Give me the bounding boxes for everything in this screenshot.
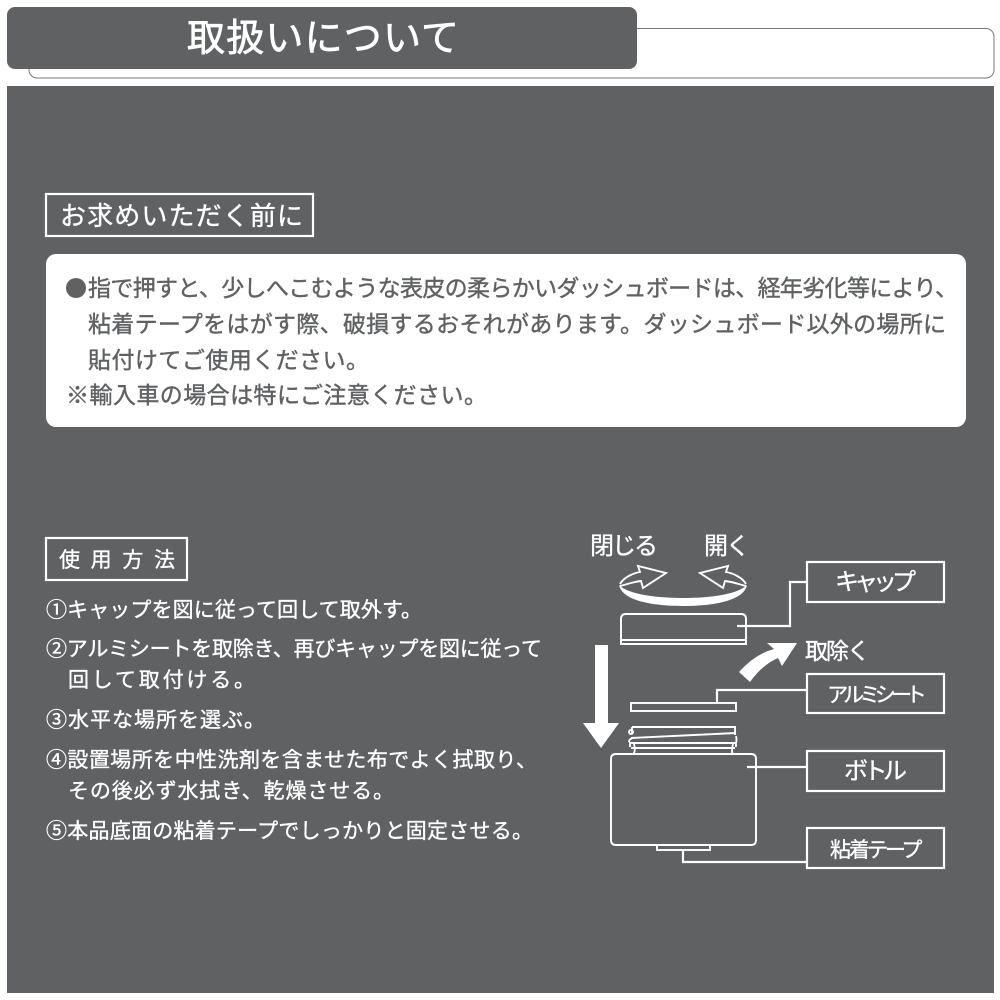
label box: bottle: ボトル — [844, 758, 907, 785]
notice text: 指で押すと、少しへこむような表皮の柔らかいダッシュボードは、経年劣化等により、 — [88, 275, 958, 301]
label box: cap: キャップ — [835, 569, 916, 596]
usage steps: ①キャップを図に従って回して取外す。 — [46, 599, 422, 622]
label: remove: 取除く — [805, 638, 870, 664]
usage steps: ⑤本品底面の粘着テープでしっかりと固定させる。 — [46, 820, 533, 843]
header outline bar — [29, 28, 994, 78]
usage steps: ②アルミシートを取除き、再びキャップを図に従って — [46, 638, 542, 661]
heading box: before purchase — [46, 194, 313, 236]
bottle — [611, 727, 756, 845]
icon: rotation ring with arrows — [619, 566, 747, 606]
usage steps: 回して取付ける。 — [68, 669, 255, 692]
leader: aluminium sheet — [717, 690, 807, 703]
leader: cap — [737, 582, 807, 626]
label box: aluminium sheet — [807, 674, 944, 713]
usage steps: ④設置場所を中性洗剤を含ませた布でよく拭取り、 — [46, 749, 537, 772]
adhesive tape — [657, 845, 710, 850]
arrow: remove — [739, 643, 797, 682]
notice text — [66, 275, 958, 408]
white notice panel — [46, 254, 966, 427]
notice text: 貼付けてご使用ください。 — [88, 347, 369, 373]
heading box: usage — [46, 538, 187, 580]
leader: tape — [683, 850, 807, 862]
label box: tape — [807, 828, 944, 868]
notice text: 粘着テープをはがす際、破損するおそれがあります。ダッシュボード以外の場所に — [88, 311, 946, 337]
aluminium sheet — [631, 703, 736, 711]
notice text: ※輸入車の場合は特にご注意ください。 — [66, 382, 487, 408]
heading box: usage: 使用方法 — [59, 549, 175, 572]
title: 取扱いについて — [187, 18, 459, 60]
label box: aluminium sheet: アルミシート — [828, 684, 925, 707]
arrow: down — [583, 645, 619, 748]
usage steps: ③水平な場所を選ぶ。 — [46, 709, 265, 732]
label box: tape: 粘着テープ — [830, 839, 922, 862]
label box: cap — [807, 562, 944, 602]
label: open: 開く — [704, 533, 750, 560]
heading box: before purchase: お求めいただく前に — [60, 201, 303, 231]
cap — [621, 614, 746, 644]
label box: bottle — [807, 751, 944, 791]
exploded bottle diagram — [583, 533, 944, 868]
usage steps: その後必ず水拭き、乾燥させる。 — [68, 780, 394, 803]
header tab — [7, 7, 637, 69]
leader: bottle — [747, 766, 807, 768]
usage steps — [46, 599, 542, 843]
label: close: 閉じる — [590, 533, 658, 560]
